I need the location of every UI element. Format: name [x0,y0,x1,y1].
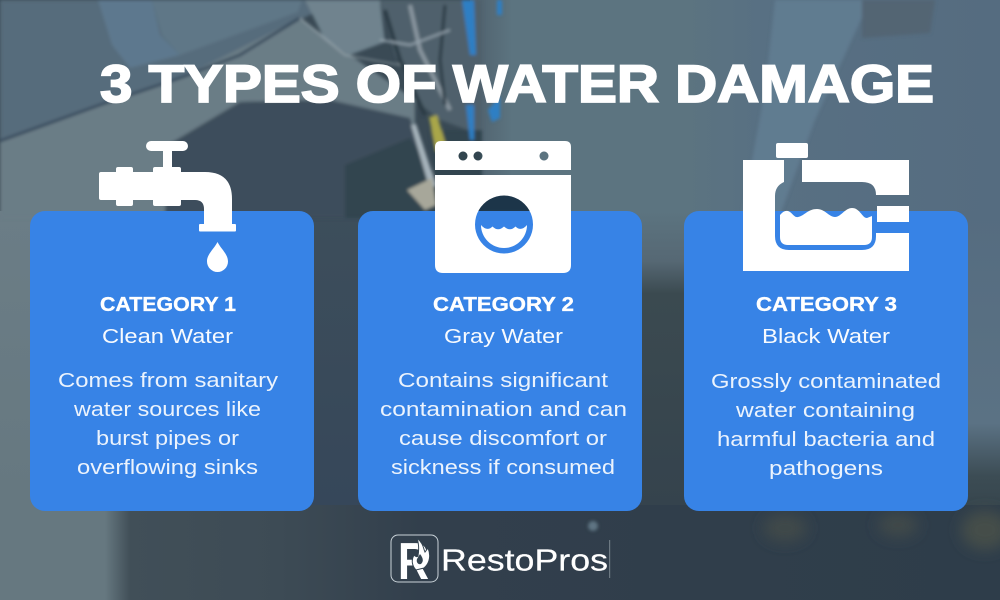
category 3 description [711,370,941,480]
logo: RestoPros [391,533,610,591]
category 1 description [58,369,279,479]
category 3 description: Grossly contaminated [711,370,941,393]
logo badge: R [398,533,429,591]
category 3 heading: CATEGORY 3 [756,294,897,316]
category 1 description: water sources like [73,398,261,421]
category 3 description: harmful bacteria and [717,428,935,451]
category 1 heading: CATEGORY 1 [100,294,236,316]
category 3 subheading: Black Water [762,325,890,348]
category 2 description: Contains significant [398,369,608,392]
category 2 description: contamination and can [380,398,627,421]
category 1 description: overflowing sinks [77,456,258,479]
category 2 heading: CATEGORY 2 [433,294,574,316]
category 2 subheading: Gray Water [444,325,563,348]
category 1 description: Comes from sanitary [58,369,279,392]
category 3 description: pathogens [769,457,883,480]
panel: category 1 [30,211,314,511]
category 3 description: water containing [735,399,915,422]
category 1 description: burst pipes or [96,427,239,450]
logo wordmark: RestoPros [441,544,608,578]
icon: washing machine [435,141,571,273]
panel: category 3 [684,211,968,511]
category 2 description [380,369,627,479]
category 2 description: sickness if consumed [391,456,615,479]
category 1 subheading: Clean Water [102,325,233,348]
panel: category 2 [358,211,642,511]
category 2 description: cause discomfort or [399,427,607,450]
icon: dripping faucet [99,141,236,272]
icon: contaminated water tank [743,143,909,271]
title: 3 TYPES OF WATER DAMAGE [100,55,934,114]
